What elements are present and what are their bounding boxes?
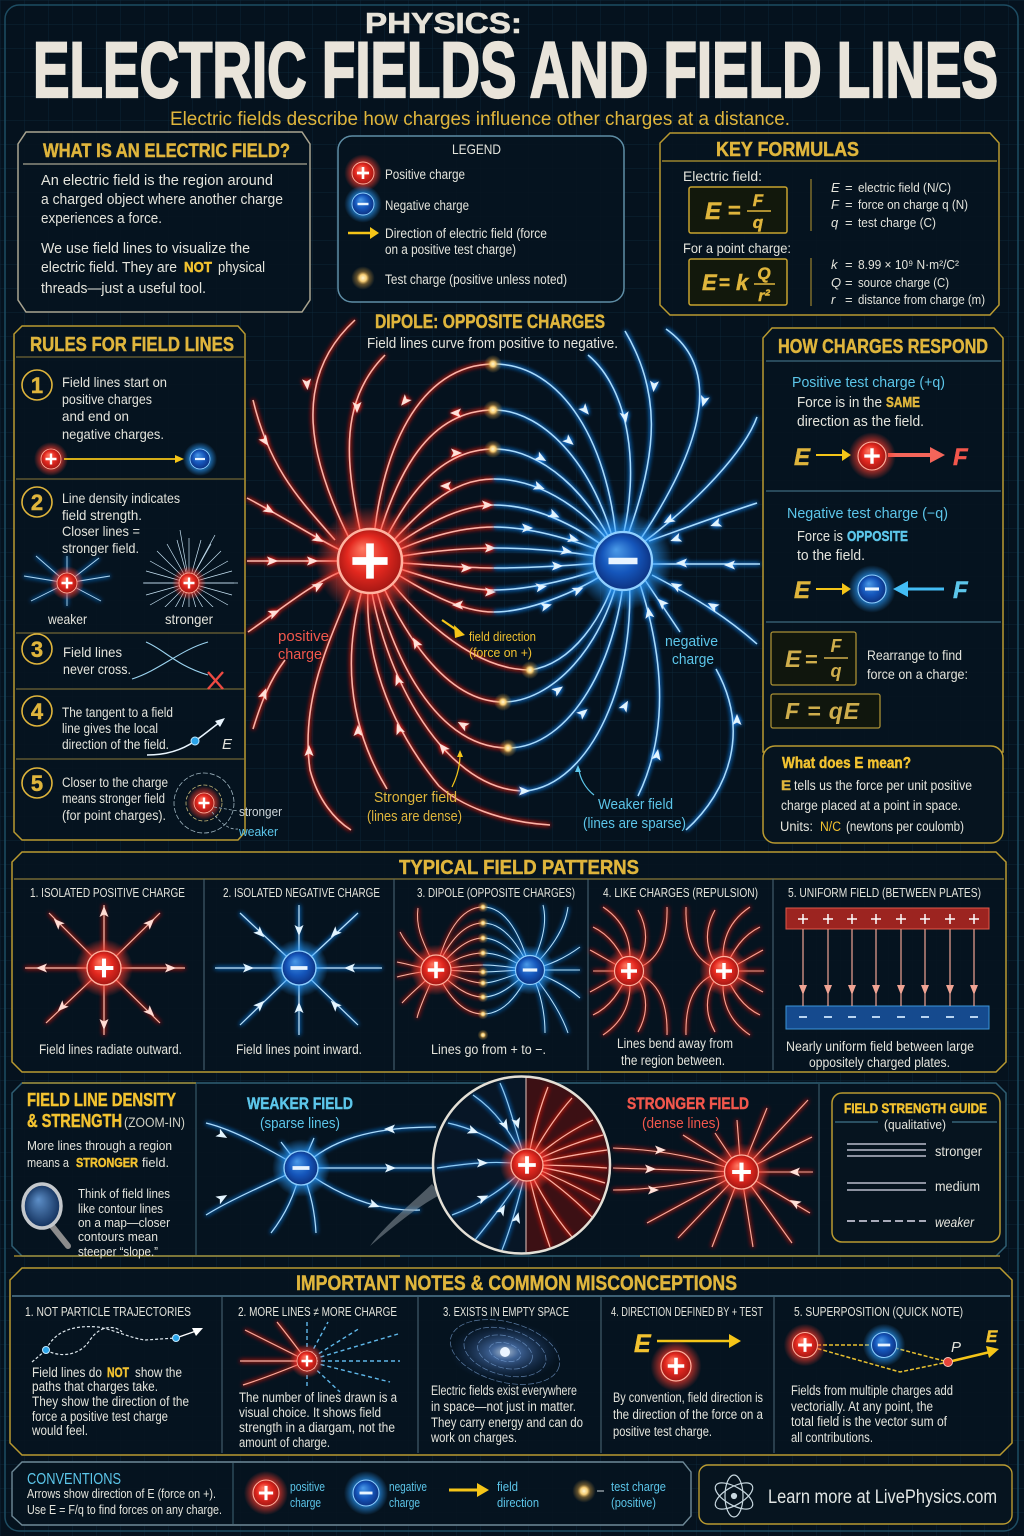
- pattern 3: dipole: 3. DIPOLE (OPPOSITE CHARGES): [417, 885, 575, 900]
- legend: positive charge: [344, 154, 465, 192]
- note 3: They carry energy and can do: [431, 1415, 583, 1430]
- contour text: [78, 1187, 170, 1259]
- panel: learn more: [699, 1465, 1012, 1524]
- rule 2: stronger field.: [62, 540, 139, 556]
- heading: WHAT IS AN ELECTRIC FIELD?: [43, 141, 290, 162]
- stronger field heading: (dense lines): [642, 1115, 720, 1132]
- rule 1: and end on: [62, 408, 129, 424]
- rearranged formula box: [771, 632, 856, 685]
- rule 2: Line density indicates: [62, 490, 180, 506]
- rule 5: (for point charges).: [62, 808, 166, 823]
- definitions: k Q r: 8.99 × 10⁹ N·m²/C²: [858, 257, 960, 272]
- formula box: E = k Q/r2: [689, 259, 787, 305]
- negative test charge section: OPPOSITE: [847, 529, 908, 545]
- conventions: positive charge: charge: [290, 1495, 321, 1510]
- note 4: By convention, field direction is: [613, 1390, 763, 1405]
- rule 3: Field lines: [63, 644, 122, 660]
- definitions: k Q r: =: [845, 275, 853, 290]
- formula box: E = F/q: F: [753, 191, 764, 210]
- pattern 4: like charges: the region between.: [621, 1053, 725, 1068]
- magnifier beam: [370, 1184, 440, 1246]
- positive test charge section: E: [794, 444, 811, 471]
- pattern 3: dipole: Lines go from + to −.: [431, 1042, 546, 1057]
- rearranged formula box: q: [830, 661, 842, 681]
- density text column: [27, 1090, 185, 1170]
- density text column: More lines through a region: [27, 1138, 172, 1153]
- panel: key formulas: [660, 133, 999, 315]
- legend heading: LEGEND: [452, 141, 501, 157]
- label: weaker field: Weaker field: [598, 797, 673, 813]
- legend: field direction arrow: on a positive test charge): [385, 242, 516, 257]
- note 5: all contributions.: [791, 1430, 873, 1445]
- panel: field line density and strength: [12, 1070, 1006, 1260]
- definitions: k Q r: Q: [831, 275, 841, 290]
- legend: negative charge: [344, 185, 469, 223]
- legend: negative charge: Negative charge: [385, 198, 469, 213]
- definitions: E F q: E: [831, 180, 840, 195]
- label: negative charge: negative: [665, 633, 718, 650]
- positive test charge section: [792, 375, 969, 480]
- note 3: 3. EXISTS IN EMPTY SPACE: [443, 1304, 569, 1319]
- label: stronger: stronger: [239, 804, 283, 819]
- note 4: positive test charge.: [613, 1424, 712, 1439]
- rule 1: positive charges: [62, 391, 152, 407]
- conventions: test charge: test charge: [611, 1479, 666, 1494]
- definitions: k Q r: r: [831, 292, 836, 307]
- subtitle: Electric fields describe how charges influence other charges at a distance.: [170, 109, 790, 130]
- panel: key formulas: For a point charge:: [683, 240, 791, 256]
- title block: [33, 8, 998, 130]
- rule 4: [22, 696, 233, 755]
- contour text: like contour lines: [78, 1202, 163, 1216]
- dipole subheading: Field lines curve from positive to negative.: [367, 336, 618, 352]
- label: positive charge: charge: [278, 646, 322, 663]
- positive test charge section: F: [953, 444, 969, 471]
- kicker: PHYSICS:: [365, 8, 522, 40]
- formula box: F = qE: F = qE: [785, 698, 860, 724]
- label: field direction: [442, 620, 536, 660]
- note 2: 2. MORE LINES ≠ MORE CHARGE: [238, 1304, 397, 1319]
- conventions: field direction: [449, 1479, 539, 1510]
- rule 1: [22, 370, 217, 476]
- pattern 1: isolated positive: Field lines radiate outward.: [39, 1042, 182, 1057]
- rule 4: The tangent to a field: [62, 705, 173, 720]
- density text column: field.: [142, 1155, 169, 1170]
- note 1: NOT: [107, 1365, 130, 1380]
- contour text: contours mean: [78, 1230, 158, 1244]
- note 2: amount of charge.: [239, 1435, 330, 1450]
- pattern 1: isolated positive: [25, 885, 185, 1057]
- conventions: test charge: (positive): [611, 1495, 656, 1510]
- field strength guide: weaker: [935, 1214, 975, 1230]
- formula box: E = F/q: =: [728, 198, 741, 223]
- note 1: paths that charges take.: [32, 1379, 158, 1394]
- negative test charge section: Force is: [797, 529, 843, 545]
- positive test charge section: direction as the field.: [797, 414, 924, 430]
- pattern 4: like charges: [590, 885, 764, 1068]
- negative test charge section: Negative test charge (−q): [787, 506, 948, 522]
- rule 1: 1: [31, 373, 43, 398]
- formula box: E = k Q/r2: r²: [758, 288, 770, 305]
- callout: what does E mean: What does E mean?: [782, 755, 911, 772]
- rule 2: weaker: [47, 611, 87, 627]
- conventions: negative charge: negative: [389, 1479, 427, 1494]
- stronger field heading: STRONGER FIELD: [627, 1094, 749, 1113]
- dipole diagram: [247, 312, 760, 832]
- panel: legend: [338, 136, 624, 302]
- conventions: field direction: field: [497, 1479, 518, 1494]
- rule 2: stronger: [165, 611, 213, 627]
- conventions: positive charge: [244, 1471, 325, 1515]
- body text: We use field lines to visualize the: [41, 240, 250, 257]
- rule 5: 5: [31, 771, 43, 796]
- large positive charge: [316, 507, 424, 615]
- legend: positive charge: Positive charge: [385, 167, 465, 182]
- definitions: E F q: q: [831, 215, 839, 230]
- label: field direction: (force on +): [469, 645, 532, 660]
- definitions: k Q r: distance from charge (m): [858, 292, 985, 307]
- callout: what does E mean: E: [781, 777, 791, 793]
- note 3: Electric fields exist everywhere: [431, 1383, 577, 1398]
- pattern 4: like charges: 4. LIKE CHARGES (REPULSION): [603, 885, 758, 900]
- blue field lines: [494, 329, 760, 830]
- callout: what does E mean: charge placed at a point in space.: [781, 797, 961, 813]
- definitions: k Q r: source charge (C): [858, 275, 949, 290]
- rearranged formula box: F: [830, 636, 842, 656]
- formula box: E = k Q/r2: =: [719, 273, 730, 294]
- test charge dots: [483, 355, 539, 757]
- stronger field diagram: [613, 1100, 813, 1247]
- label: stronger field: (lines are dense): [367, 809, 462, 825]
- rule 2: field strength.: [62, 507, 142, 523]
- rearrange text: Rearrange to find: [867, 647, 962, 663]
- pattern 5: uniform field: oppositely charged plates.: [809, 1055, 950, 1070]
- positive test charge section: Positive test charge (+q): [792, 375, 945, 391]
- note 5: 5. SUPERPOSITION (QUICK NOTE): [794, 1304, 963, 1319]
- pattern 2: isolated negative: Field lines point inward.: [236, 1042, 362, 1057]
- panel: important notes and misconceptions: [10, 1268, 1012, 1455]
- rearrange text: [867, 647, 968, 682]
- note 5: [784, 1304, 999, 1445]
- density text column: (ZOOM-IN): [124, 1114, 185, 1130]
- rule 5: Closer to the charge: [62, 775, 168, 790]
- positive test charge section: SAME: [886, 395, 920, 411]
- note 3: work on charges.: [430, 1430, 517, 1445]
- panel: conventions: [12, 1462, 691, 1525]
- label: stronger field: [367, 750, 463, 825]
- body text: physical: [218, 259, 265, 276]
- pattern 1: isolated positive: 1. ISOLATED POSITIVE CHARGE: [30, 885, 185, 900]
- rearranged formula box: E: [785, 646, 802, 673]
- body text: a charged object where another charge: [41, 191, 283, 208]
- density text column: means a: [27, 1155, 70, 1170]
- formula box: E = k Q/r2: Q: [757, 264, 771, 283]
- pattern 2: isolated negative: 2. ISOLATED NEGATIVE CHARGE: [223, 885, 380, 900]
- note 4: E: [634, 1330, 652, 1358]
- patterns heading: TYPICAL FIELD PATTERNS: [399, 857, 639, 879]
- definitions: E F q: =: [845, 197, 853, 212]
- panel: key formulas: Electric field:: [683, 168, 762, 184]
- body text: electric field. They are: [41, 259, 177, 276]
- note 2: The number of lines drawn is a: [239, 1390, 397, 1405]
- pattern 3: dipole: [397, 885, 580, 1057]
- label: stronger field: Stronger field: [374, 790, 457, 806]
- callout: what does E mean: Units:: [780, 819, 813, 834]
- negative test charge section: to the field.: [797, 548, 865, 564]
- callout: what does E mean: N/C: [820, 819, 841, 834]
- field strength guide: stronger: [935, 1143, 982, 1159]
- negative test charge section: E: [794, 577, 811, 604]
- field strength guide: medium: [935, 1178, 980, 1194]
- legend: field direction arrow: Direction of electric field (force: [385, 226, 547, 241]
- definitions: E F q: =: [845, 180, 853, 195]
- magnified circle view: [432, 1075, 612, 1255]
- rule 5: [22, 768, 238, 833]
- callout: what does E mean: [763, 746, 1003, 843]
- definitions: k Q r: =: [845, 292, 853, 307]
- contour text: steeper “slope.”: [78, 1245, 158, 1259]
- definitions: E F q: F: [831, 197, 840, 212]
- panel: rules for field lines: [14, 326, 245, 840]
- pattern 4: like charges: Lines bend away from: [617, 1036, 733, 1051]
- note 2: strength in a diargam, not the: [239, 1420, 395, 1435]
- negative test charge section: F: [953, 577, 969, 604]
- formula box: E = F/q: E: [705, 198, 722, 225]
- rule 1: negative charges.: [62, 426, 164, 442]
- stronger field heading: [627, 1094, 749, 1132]
- rules heading: RULES FOR FIELD LINES: [30, 334, 234, 356]
- large negative charge: [574, 512, 672, 610]
- weaker field diagram: [206, 1123, 436, 1233]
- conventions: positive charge: positive: [290, 1479, 325, 1494]
- pattern 2: isolated negative: [215, 885, 382, 1057]
- weaker field heading: (sparse lines): [260, 1115, 340, 1132]
- positive test charge section: Force is in the: [797, 395, 882, 411]
- conventions text: [27, 1471, 222, 1517]
- label: field direction: field direction: [469, 629, 536, 644]
- field strength guide: FIELD STRENGTH GUIDE: [844, 1100, 987, 1116]
- callout: what does E mean: tells us the force per unit positive: [794, 777, 972, 793]
- rearrange text: force on a charge:: [867, 666, 968, 682]
- label: positive charge: [278, 628, 329, 663]
- rule 2: Closer lines =: [62, 523, 140, 539]
- contour text: Think of field lines: [78, 1187, 170, 1201]
- note 1: force a positive test charge: [32, 1409, 168, 1424]
- weaker field heading: [247, 1094, 353, 1132]
- formulas heading: KEY FORMULAS: [716, 139, 859, 161]
- note 4: the direction of the force on a: [613, 1407, 763, 1422]
- note 1: 1. NOT PARTICLE TRAJECTORIES: [25, 1304, 191, 1319]
- label: negative charge: [665, 633, 718, 668]
- conventions: negative charge: charge: [389, 1495, 420, 1510]
- label: positive charge: positive: [278, 628, 329, 645]
- note 2: [238, 1304, 400, 1450]
- rule 4: line gives the local: [62, 721, 158, 736]
- body text: NOT: [184, 259, 212, 276]
- note 3: in space—not just in matter.: [431, 1399, 576, 1414]
- conventions text: Use E = F/q to find forces on any charge.: [27, 1503, 222, 1517]
- formula box: E = k Q/r2: E: [702, 270, 718, 295]
- rule 2: [22, 487, 238, 628]
- rule 4: 4: [31, 699, 44, 724]
- legend: test charge: Test charge (positive unless noted): [385, 272, 567, 287]
- pattern 5: uniform field: Nearly uniform field between large: [786, 1039, 974, 1054]
- conventions: test charge: [572, 1479, 666, 1510]
- panel: typical field patterns: [12, 852, 1006, 1072]
- field strength guide: (qualitative): [884, 1117, 946, 1132]
- note 1: show the: [135, 1365, 182, 1380]
- rule 4: direction of the field.: [62, 737, 169, 752]
- definitions: E F q: force on charge q (N): [858, 197, 968, 212]
- density text column: FIELD LINE DENSITY: [27, 1090, 176, 1110]
- contour text: on a map—closer: [78, 1216, 170, 1230]
- rule 3: [22, 634, 223, 689]
- formula box: E = F/q: q: [753, 213, 764, 232]
- note 5: vectorially. At any point, the: [791, 1399, 933, 1414]
- rule 4: E: [222, 736, 233, 753]
- panel: how charges respond: [763, 328, 1003, 752]
- pattern 5: uniform field: [786, 885, 989, 1070]
- note 1: Field lines do: [32, 1365, 102, 1380]
- weaker field heading: WEAKER FIELD: [247, 1094, 353, 1113]
- note 5: Fields from multiple charges add: [791, 1383, 953, 1398]
- note 1: They show the direction of the: [32, 1394, 189, 1409]
- dipole heading: DIPOLE: OPPOSITE CHARGES: [375, 312, 605, 333]
- formula box: E = k Q/r2: k: [736, 270, 750, 295]
- icon: magnifying glass: [23, 1184, 68, 1246]
- note 5: total field is the vector sum of: [791, 1414, 947, 1429]
- body text: threads—just a useful tool.: [41, 280, 206, 297]
- label: weaker: weaker: [238, 824, 279, 839]
- negative test charge section: [787, 506, 969, 613]
- note 1: [25, 1304, 203, 1438]
- rule 3: 3: [31, 637, 43, 662]
- red field lines: [247, 320, 550, 830]
- conventions: field direction: direction: [497, 1495, 539, 1510]
- formula box: F = qE: [771, 694, 880, 728]
- conventions text: CONVENTIONS: [27, 1471, 121, 1488]
- rule 1: Field lines start on: [62, 374, 167, 390]
- note 5: E: [986, 1327, 998, 1346]
- rule 2: 2: [31, 490, 43, 515]
- legend: field direction arrow: [348, 226, 547, 257]
- definitions: E F q: =: [845, 215, 853, 230]
- icon: atom: [711, 1475, 757, 1517]
- rule 3: never cross.: [63, 661, 131, 677]
- callout: what does E mean: (newtons per coulomb): [846, 819, 964, 834]
- conventions text: Arrows show direction of E (force on +).: [27, 1487, 216, 1501]
- label: weaker field: [575, 765, 686, 832]
- conventions: negative charge: [344, 1471, 427, 1515]
- note 1: would feel.: [31, 1423, 88, 1438]
- definitions: k Q r: [831, 257, 985, 307]
- note 5: P: [951, 1339, 961, 1356]
- note 2: visual choice. It shows field: [239, 1405, 381, 1420]
- density text column: & STRENGTH: [27, 1111, 122, 1131]
- definitions: k Q r: =: [845, 257, 853, 272]
- definitions: k Q r: k: [831, 257, 839, 272]
- formula box: E = F/q: [689, 187, 787, 233]
- rearranged formula box: =: [805, 647, 818, 672]
- panel: what is an electric field: [18, 132, 310, 312]
- body text: [41, 172, 283, 297]
- note 4: 4. DIRECTION DEFINED BY + TEST: [611, 1304, 763, 1319]
- body text: experiences a force.: [41, 210, 162, 227]
- note 3: [430, 1304, 583, 1445]
- density text column: STRONGER: [76, 1155, 139, 1170]
- rule 5: means stronger field: [62, 791, 165, 806]
- definitions: E F q: electric field (N/C): [858, 180, 951, 195]
- label: negative charge: charge: [672, 651, 714, 668]
- note 4: [611, 1304, 763, 1439]
- field strength guide: [832, 1093, 1000, 1242]
- body text: An electric field is the region around: [41, 172, 273, 189]
- notes heading: IMPORTANT NOTES & COMMON MISCONCEPTIONS: [296, 1272, 737, 1295]
- label: weaker field: (lines are sparse): [583, 816, 686, 832]
- legend: test charge: [351, 266, 567, 290]
- definitions: E F q: [831, 180, 968, 230]
- definitions: E F q: test charge (C): [858, 215, 936, 230]
